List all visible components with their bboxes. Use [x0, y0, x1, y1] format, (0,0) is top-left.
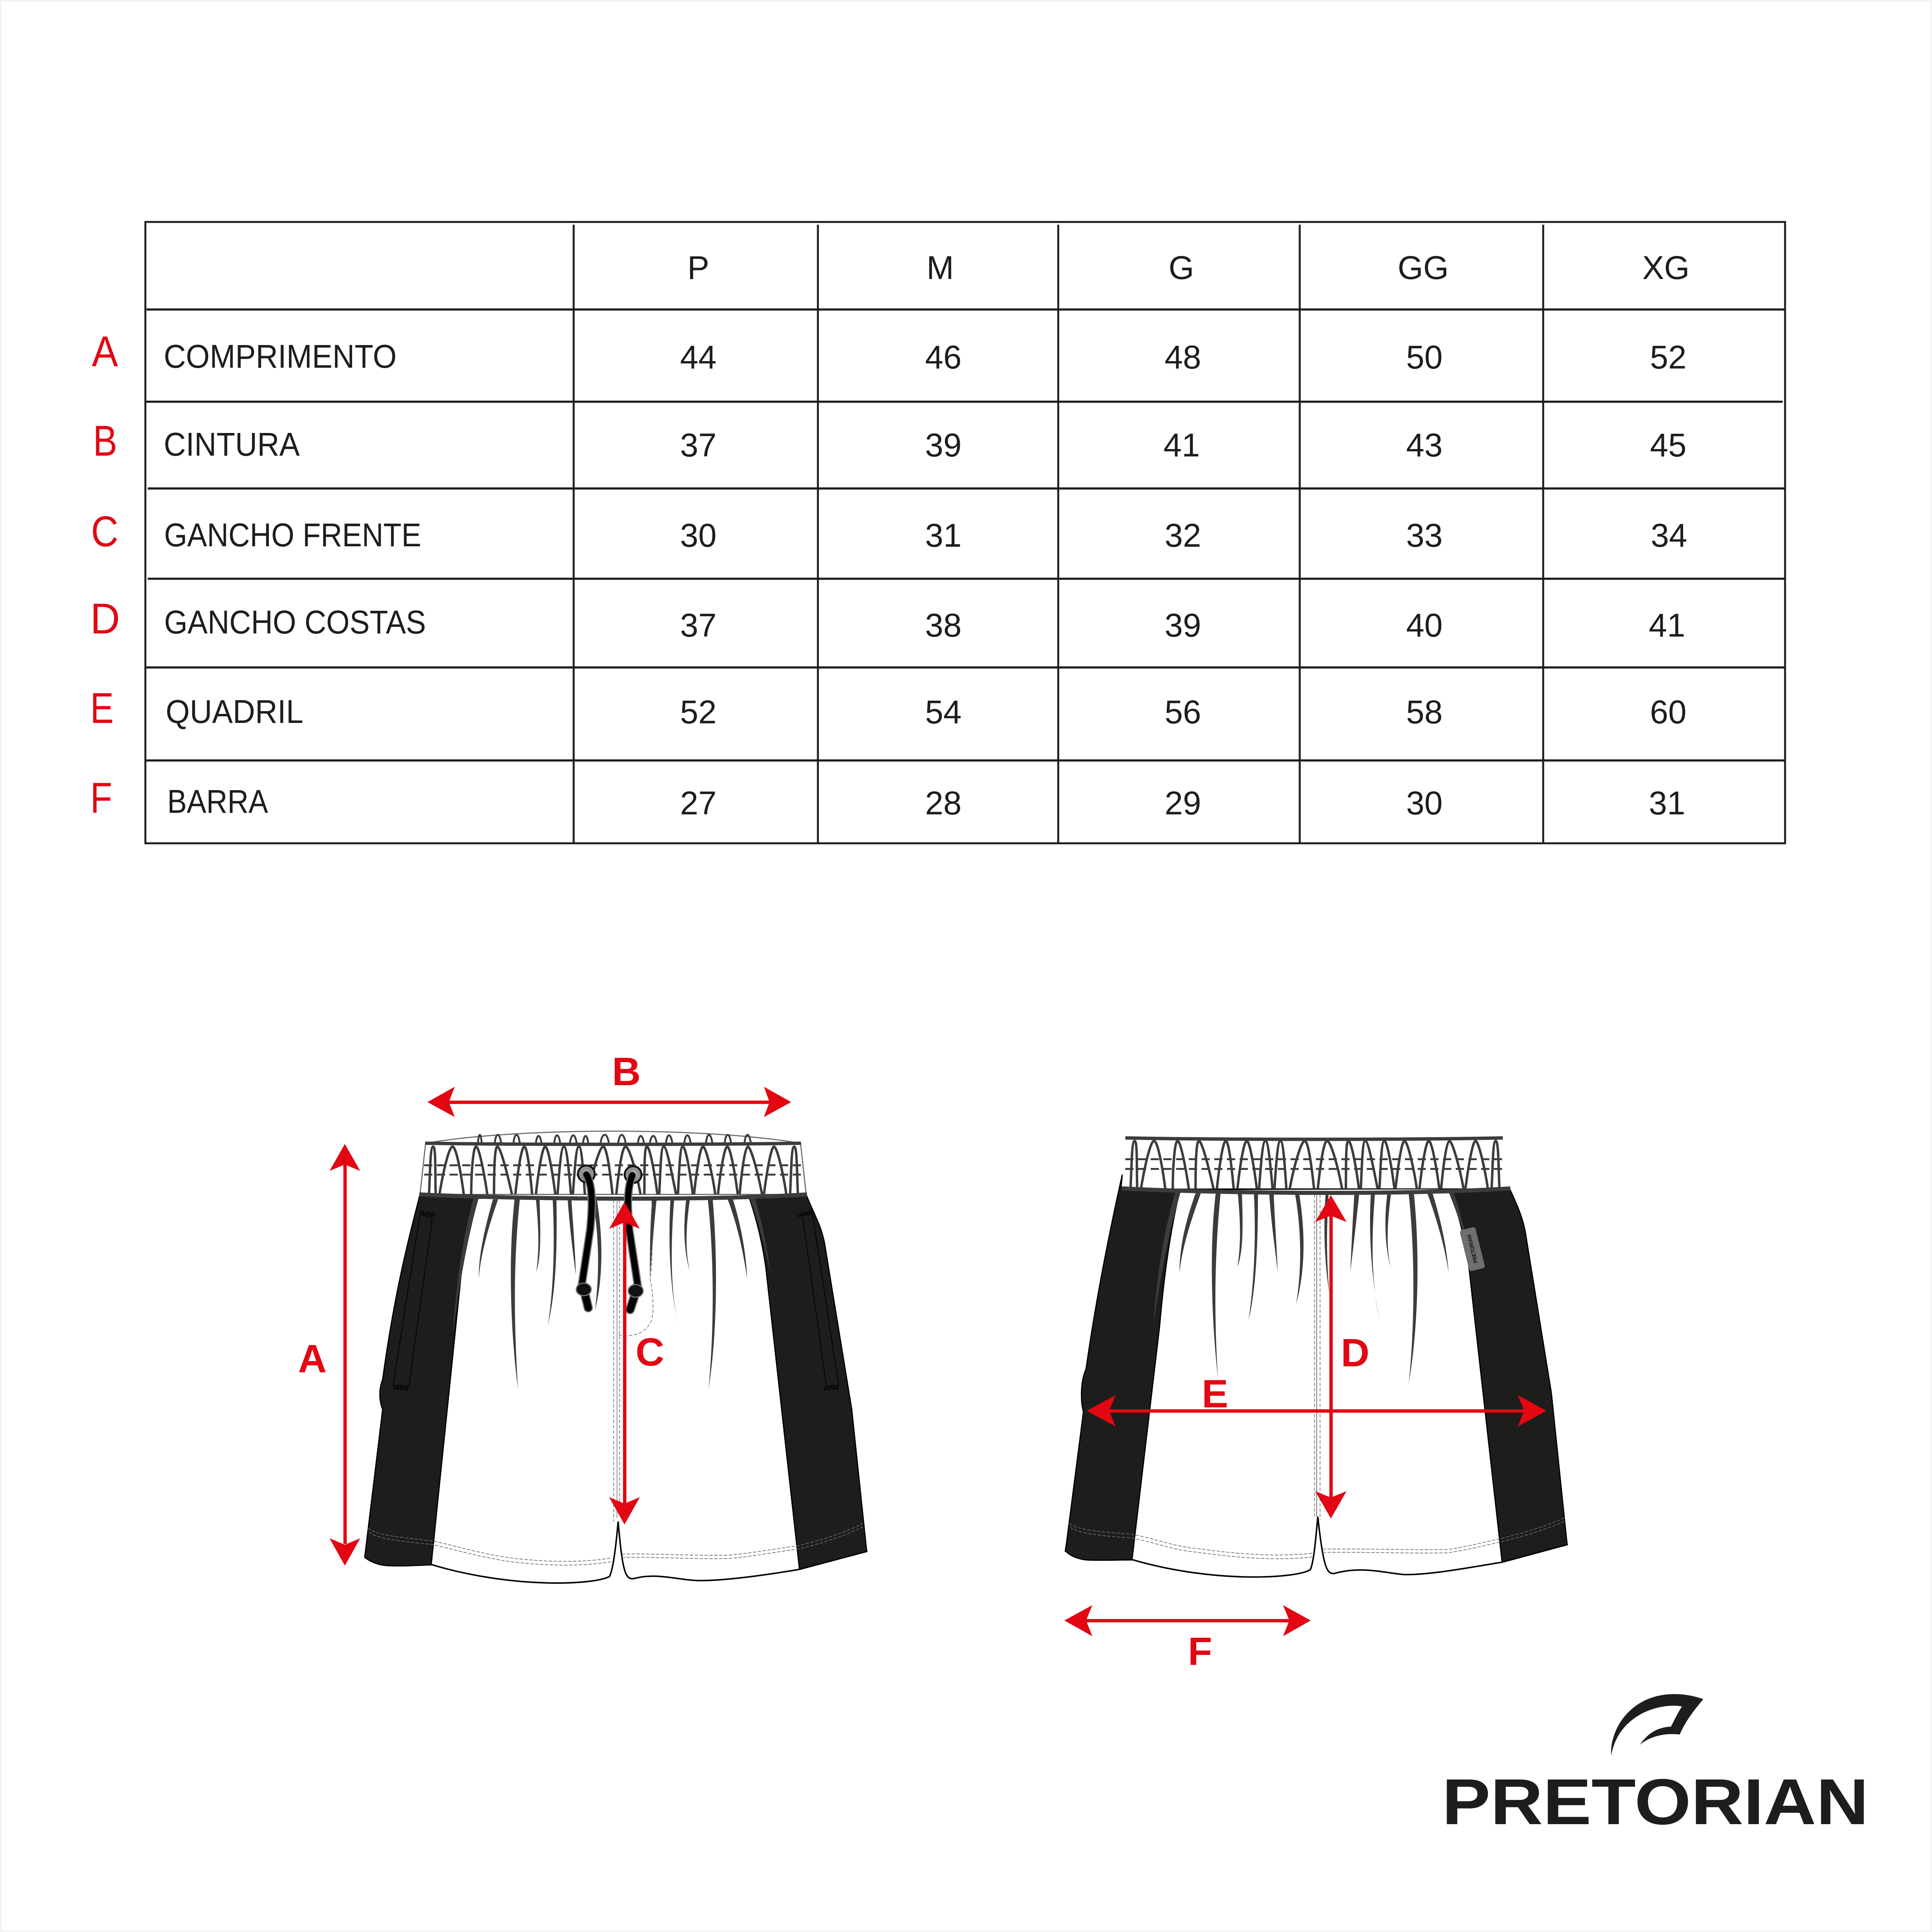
hem stitching [1069, 1518, 1565, 1559]
drawstring right [624, 1165, 643, 1309]
row F: barra [90, 774, 1685, 822]
row C: gancho frente: 30 [680, 517, 717, 554]
fabric pleats [479, 1199, 747, 1389]
row C: gancho frente: 33 [1406, 517, 1443, 554]
row D: gancho costas: 41 [1649, 607, 1685, 644]
fabric pleats [1179, 1193, 1449, 1384]
row E: quadril: 54 [925, 694, 962, 730]
row F: barra: F [90, 774, 112, 822]
label E: E [1202, 1372, 1228, 1416]
right black side panel [749, 1195, 867, 1569]
wordmark: PRETORIAN [1442, 1766, 1869, 1838]
arrow A: length [329, 1144, 360, 1565]
row B: cintura: 37 [680, 427, 717, 463]
row C: gancho frente: C [91, 508, 118, 556]
waistband [1122, 1138, 1510, 1193]
arrow F: hem [1064, 1605, 1311, 1636]
header row: sizes [687, 249, 1690, 286]
arrow D: back rise [1315, 1195, 1347, 1519]
row D: gancho costas: D [90, 595, 120, 643]
row C: gancho frente [91, 508, 1687, 556]
row B: cintura: CINTURA [164, 426, 300, 463]
left black side panel [365, 1195, 478, 1566]
row D: gancho costas: GANCHO COSTAS [164, 604, 426, 640]
row C: gancho frente: 32 [1165, 517, 1201, 554]
row A: comprimento [92, 327, 1687, 376]
header row: sizes: XG [1642, 249, 1690, 286]
header row: sizes: M [927, 249, 954, 286]
row A: comprimento: 48 [1165, 339, 1201, 376]
icon: logo fin [1611, 1694, 1703, 1756]
label C: C [636, 1330, 664, 1374]
header row: sizes: GG [1398, 249, 1449, 286]
row C: gancho frente: 34 [1651, 517, 1687, 554]
header row: sizes: P [687, 249, 709, 286]
row E: quadril: QUADRIL [166, 693, 303, 730]
drawstring left [576, 1165, 596, 1308]
right pocket [798, 1211, 839, 1389]
front view of shorts with measurements [298, 1050, 867, 1583]
row E: quadril: 52 [680, 694, 717, 730]
panel seam highlights [453, 1197, 770, 1335]
back view of shorts with measurements [1064, 1138, 1567, 1674]
shorts body [1066, 1188, 1567, 1577]
label D: D [1341, 1331, 1370, 1375]
arrow C: front rise [609, 1202, 640, 1524]
row D: gancho costas: 39 [1165, 607, 1201, 644]
row A: comprimento: 46 [925, 339, 962, 376]
row F: barra: 28 [925, 785, 962, 821]
row A: comprimento: 44 [680, 339, 717, 376]
row F: barra: BARRA [167, 783, 268, 820]
row F: barra: 30 [1406, 785, 1443, 821]
table grid [145, 222, 1785, 843]
right black side panel [1451, 1188, 1567, 1562]
row F: barra: 31 [1649, 785, 1685, 821]
row F: barra: 27 [680, 785, 717, 821]
panel seam highlights [1153, 1192, 1469, 1328]
row B: cintura: 39 [925, 427, 962, 463]
row E: quadril: 56 [1165, 694, 1201, 730]
center seam and gusset stitching [614, 1200, 653, 1522]
left black side panel [1066, 1175, 1179, 1560]
arrow E: hip [1087, 1395, 1547, 1426]
waistband [419, 1131, 807, 1199]
row E: quadril [90, 684, 1687, 732]
row E: quadril: 58 [1406, 694, 1443, 730]
row B: cintura: 43 [1406, 427, 1443, 463]
label F: F [1188, 1630, 1212, 1674]
row F: barra: 29 [1165, 785, 1201, 821]
hem stitching [368, 1523, 863, 1565]
label B: B [612, 1050, 640, 1094]
row B: cintura: B [93, 417, 117, 465]
center seam stitching [1315, 1194, 1320, 1521]
brand patch: PRETORIAN [1466, 1234, 1479, 1264]
row C: gancho frente: GANCHO FRENTE [164, 517, 421, 553]
row E: quadril: 60 [1650, 694, 1687, 730]
row D: gancho costas [90, 595, 1685, 644]
row B: cintura [93, 417, 1687, 465]
header row: sizes: G [1168, 249, 1194, 286]
arrow B: waist [428, 1087, 791, 1117]
row D: gancho costas: 40 [1406, 607, 1443, 644]
row A: comprimento: 50 [1406, 339, 1443, 376]
brand patch [1460, 1227, 1485, 1272]
shorts body [365, 1195, 867, 1583]
row B: cintura: 41 [1163, 427, 1200, 463]
size chart table [90, 222, 1785, 843]
Pretorian logo [1442, 1694, 1869, 1838]
row E: quadril: E [90, 684, 114, 732]
row C: gancho frente: 31 [925, 517, 962, 554]
row D: gancho costas: 37 [680, 607, 717, 644]
row A: comprimento: 52 [1650, 339, 1687, 376]
row A: comprimento: A [92, 327, 118, 376]
row D: gancho costas: 38 [925, 607, 962, 644]
left pocket [393, 1212, 435, 1389]
row A: comprimento: COMPRIMENTO [164, 338, 397, 375]
label A: A [298, 1337, 327, 1381]
row B: cintura: 45 [1650, 427, 1687, 463]
